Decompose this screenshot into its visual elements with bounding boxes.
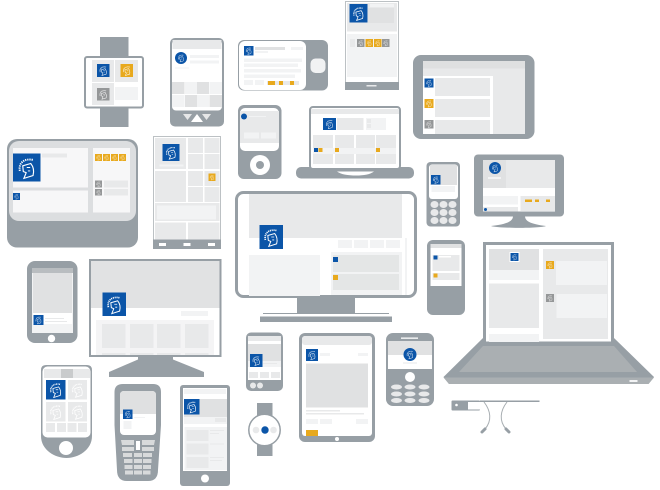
device: small smartphone [246,332,283,391]
device: landscape phone [238,40,328,90]
device: wide tablet top right [413,55,534,139]
device: narrow phone [427,240,465,315]
device: desktop monitor [236,192,416,322]
device: smartphone with list [180,385,230,486]
device: television [90,260,220,377]
device: portrait tablet top [345,2,399,90]
logo on large laptop [510,252,520,262]
device: phone lower left [27,261,78,343]
device: music player [238,105,282,179]
device: keyboard smartphone [386,333,434,406]
device: small monitor [474,154,564,228]
device: landscape tablet [7,139,138,248]
device: keypad phone [426,162,460,226]
device: square smartwatch [85,37,143,127]
device: phone with tile grid [41,365,92,458]
device: round smartwatch [249,403,280,456]
device: phone with triangle buttons [170,38,224,126]
device: small laptop [296,107,414,178]
device: large laptop [444,244,654,384]
device: tall tile tablet [153,136,221,249]
device: smart glasses [452,400,540,432]
device: candybar phone [114,384,161,481]
large logo tile [13,154,40,182]
device: portrait tablet bottom [299,333,375,442]
